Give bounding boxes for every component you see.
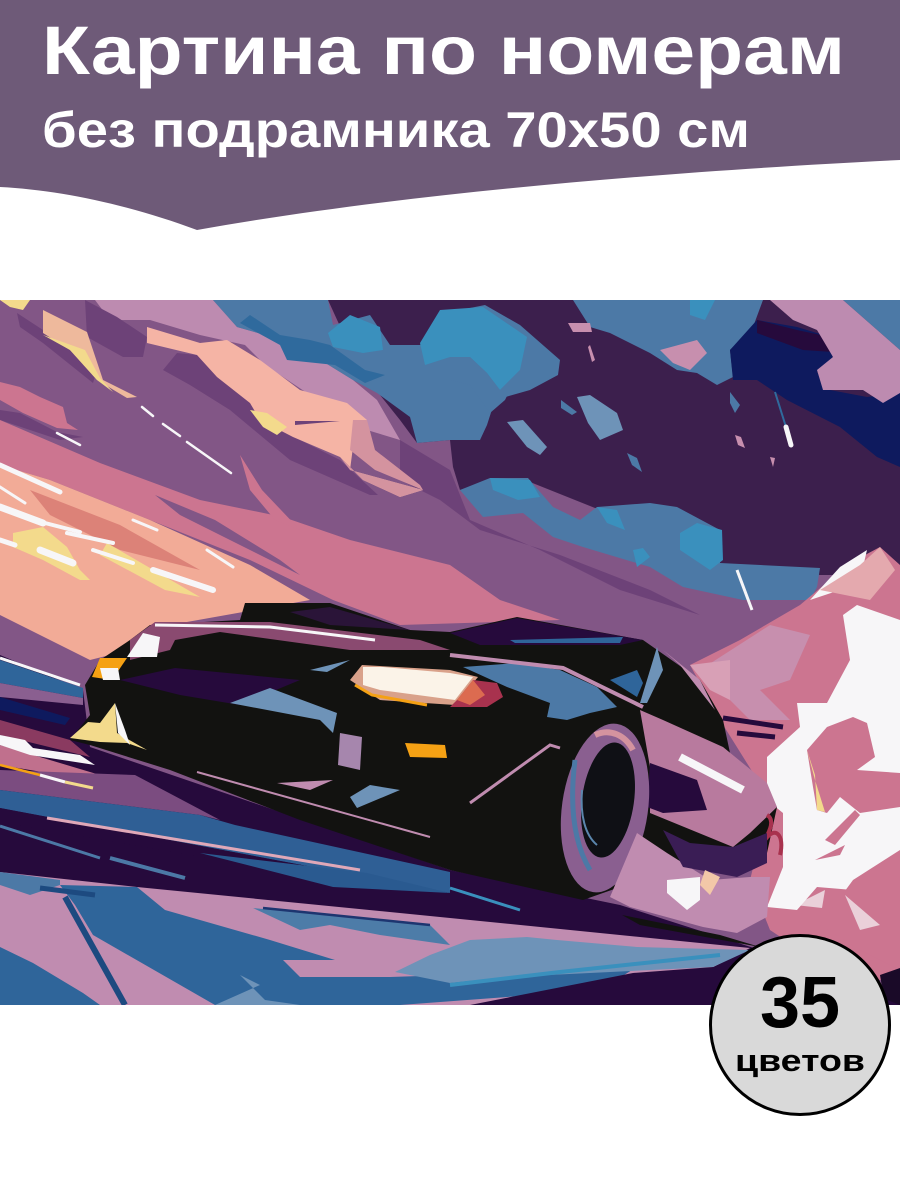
sky: left sunset clouds	[0, 300, 700, 660]
pink body line	[470, 745, 560, 803]
painting: car drifting at sunset	[0, 300, 900, 1005]
dust behind wheel	[610, 830, 770, 947]
subtitle: без подрамника 70х50 см	[42, 102, 750, 158]
title: Картина по номерам	[42, 12, 845, 89]
sky: dark storm area	[328, 300, 900, 575]
reflection on rear	[230, 688, 337, 733]
rear side panel	[640, 710, 777, 847]
tail light	[350, 665, 478, 705]
car body	[70, 603, 783, 900]
fender highlight	[463, 663, 617, 720]
side glass	[610, 670, 643, 697]
lower reflections	[197, 772, 430, 837]
header banner	[0, 0, 900, 230]
sky: blue clouds	[213, 300, 900, 610]
tyre smoke	[690, 547, 900, 1005]
road surface	[0, 872, 750, 1005]
fog lamp	[405, 743, 447, 758]
badge caption: цветов	[735, 1043, 865, 1078]
road	[0, 655, 900, 1005]
sky: white sun streaks	[0, 407, 233, 590]
boot lid band	[130, 622, 450, 660]
badge: 35 colours	[710, 936, 890, 1114]
number plate	[338, 733, 362, 770]
rear wheel	[560, 724, 650, 892]
roof	[450, 618, 643, 645]
rear windscreen	[290, 607, 410, 630]
left corner of the car	[88, 687, 115, 717]
road light streaks	[0, 658, 520, 910]
number of colours: 35	[760, 963, 840, 1043]
